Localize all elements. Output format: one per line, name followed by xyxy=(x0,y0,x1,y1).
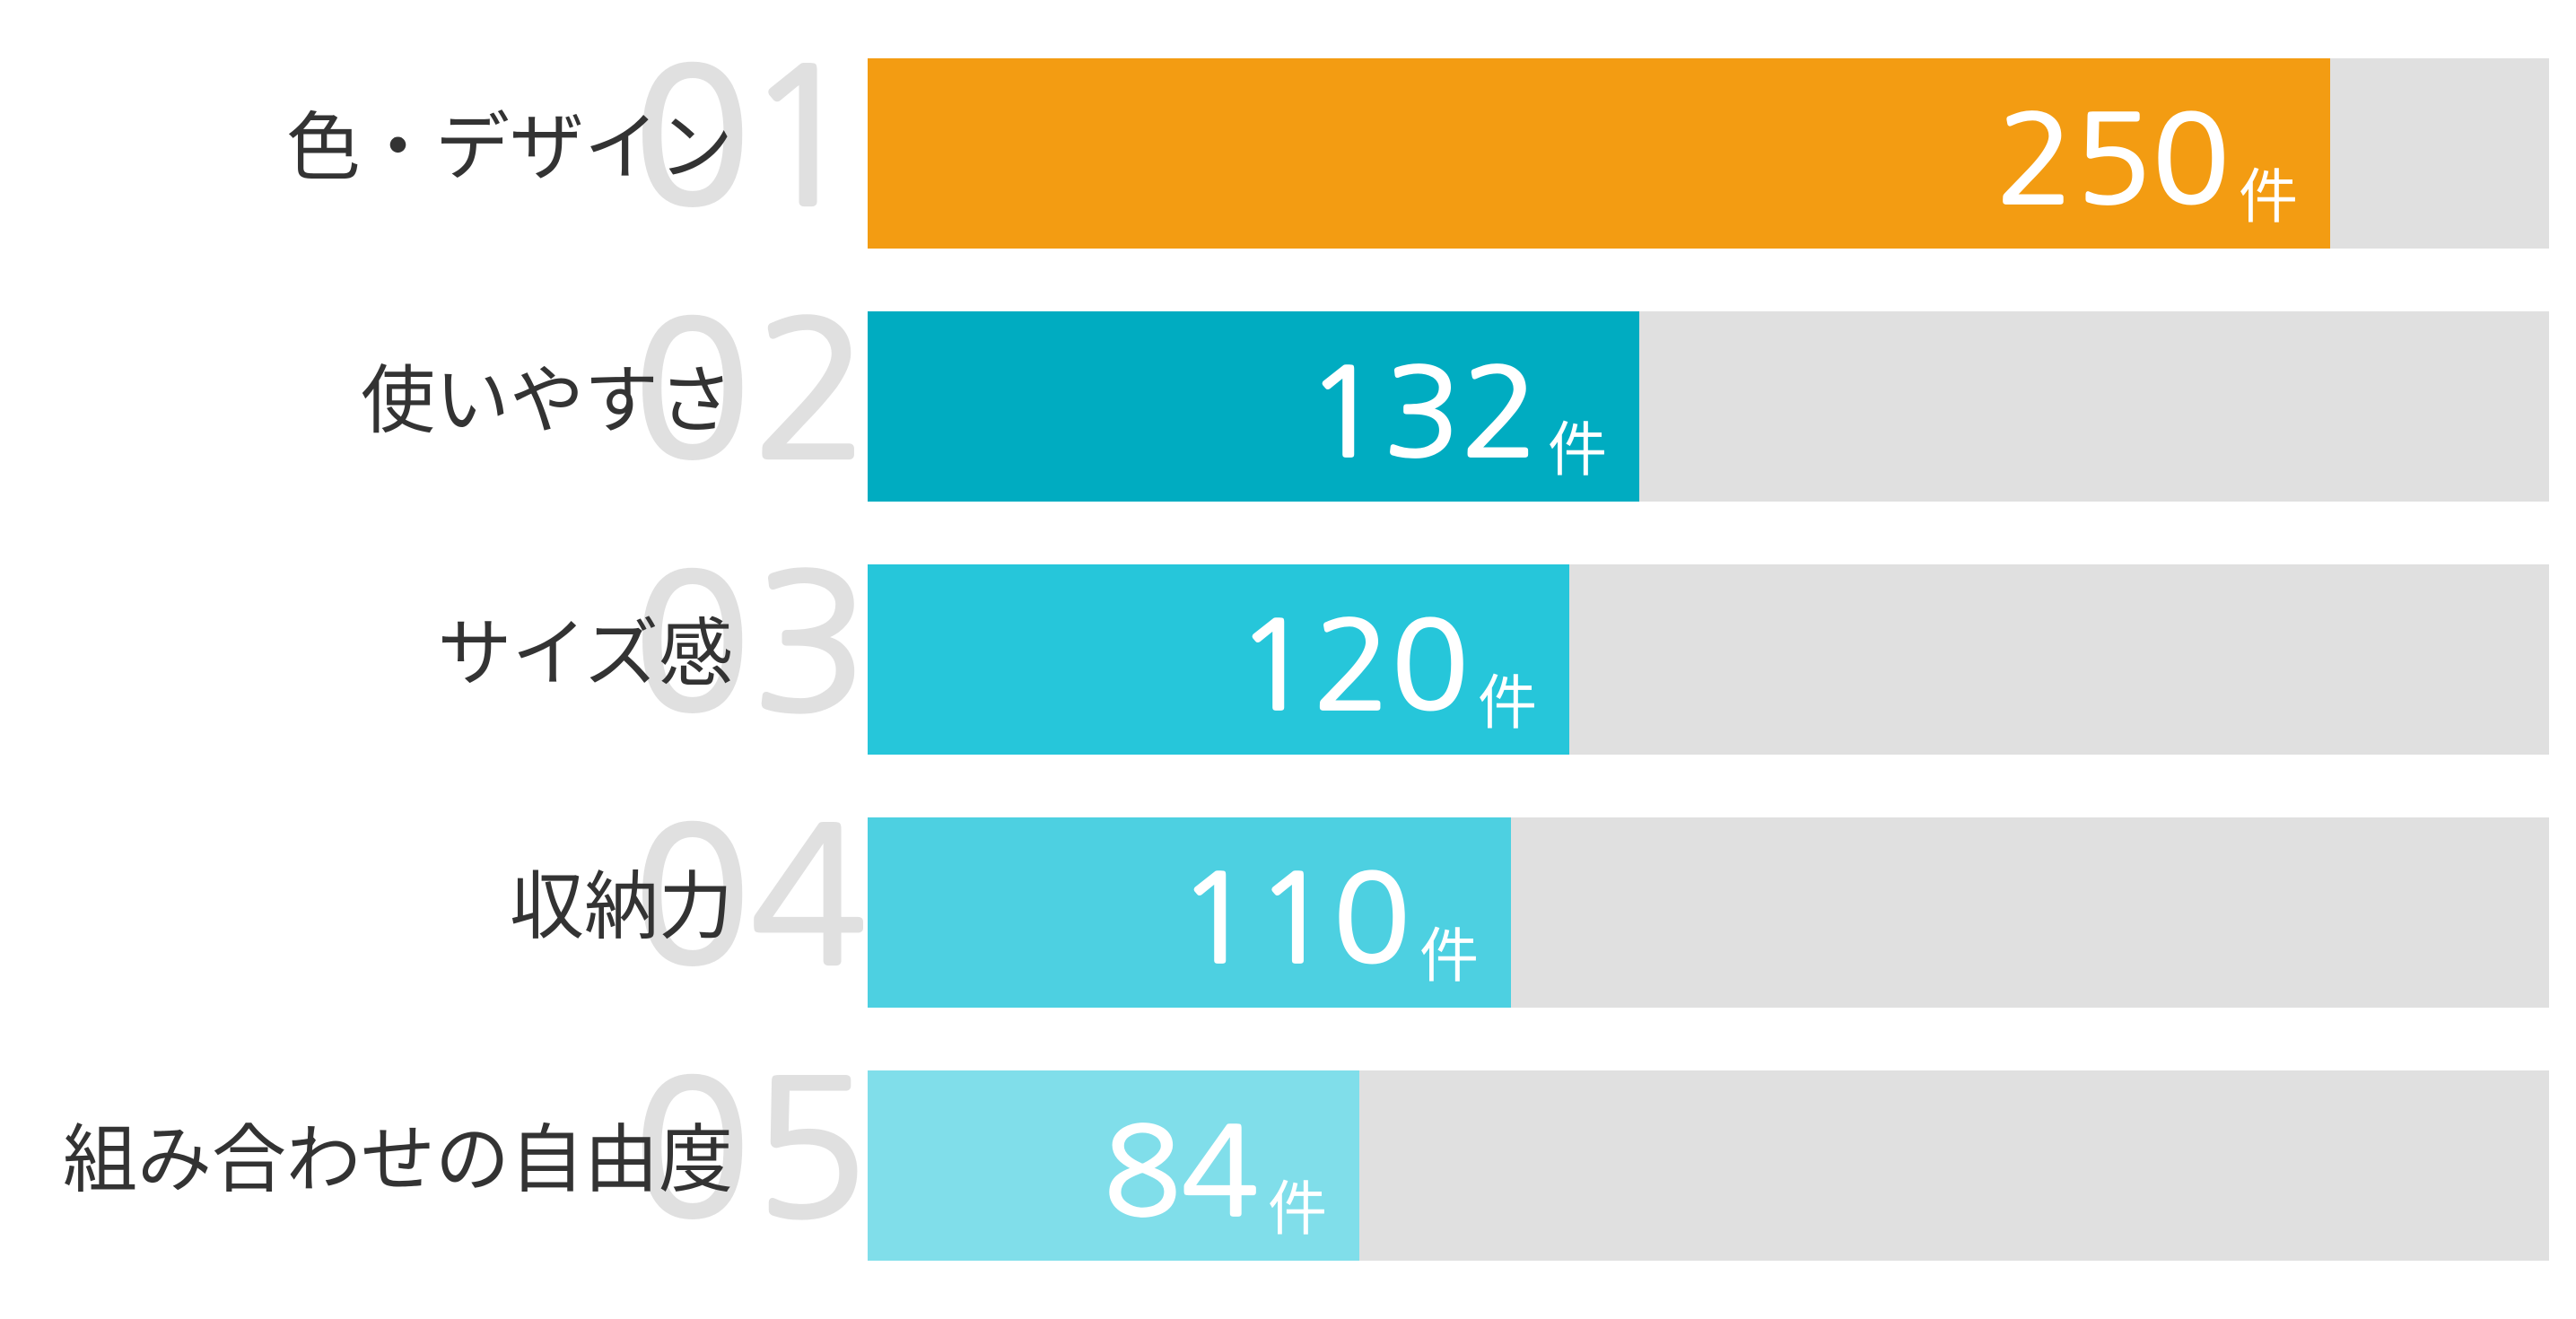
bar track xyxy=(868,58,2549,249)
bar track xyxy=(868,1070,2549,1261)
row 05: freedom of combination xyxy=(63,1056,2549,1261)
row 03: size xyxy=(437,550,2549,755)
bar value xyxy=(868,58,2330,249)
unit: 件 xyxy=(1548,402,1607,488)
bar track xyxy=(868,817,2549,1008)
bar track xyxy=(868,311,2549,502)
value number: 132 xyxy=(1305,353,1539,474)
rank number 02: 02 xyxy=(633,297,870,484)
unit: 件 xyxy=(1419,908,1479,994)
value number: 120 xyxy=(1236,606,1469,727)
bar value xyxy=(868,311,1639,502)
label: サイズ感 xyxy=(437,593,733,701)
bar value xyxy=(868,564,1569,755)
value number: 250 xyxy=(1996,100,2230,221)
unit: 件 xyxy=(1268,1161,1327,1247)
row 02: ease of use xyxy=(361,297,2549,502)
rank number 04: 04 xyxy=(633,803,868,990)
rank number 03: 03 xyxy=(633,550,869,737)
bar value xyxy=(868,1070,1359,1261)
row 04: storage xyxy=(510,803,2549,1008)
row 01: colour and design xyxy=(286,44,2549,249)
unit: 件 xyxy=(1478,655,1537,741)
rank number 05: 05 xyxy=(633,1056,869,1243)
label: 収納力 xyxy=(510,846,733,954)
value number: 84 xyxy=(1104,1112,1259,1233)
bar track xyxy=(868,564,2549,755)
unit: 件 xyxy=(2239,149,2298,235)
rank number 01: 01 xyxy=(633,44,860,231)
label: 組み合わせの自由度 xyxy=(63,1099,733,1207)
label: 色・デザイン xyxy=(286,87,733,195)
label: 使いやすさ xyxy=(361,340,733,448)
bar value xyxy=(868,817,1511,1008)
value number: 110 xyxy=(1177,859,1410,980)
